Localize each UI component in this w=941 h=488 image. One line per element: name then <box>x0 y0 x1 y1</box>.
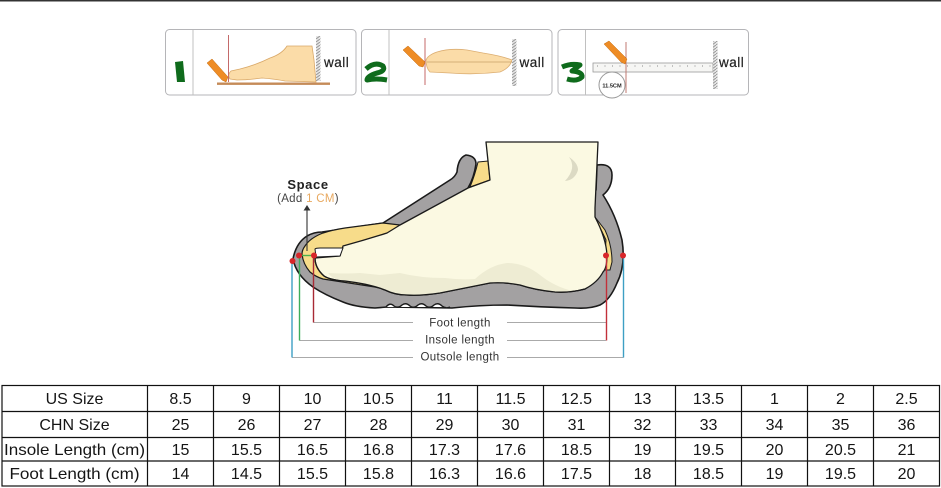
wall label: wall <box>323 55 349 70</box>
row: foot length <box>10 466 916 483</box>
row: foot length: Foot Length (cm) <box>10 466 140 483</box>
row: CHN size: 29 <box>436 417 454 434</box>
dimension: outsole length: Outsole length <box>420 352 500 364</box>
row: US size: 1 <box>770 391 779 408</box>
row: CHN size <box>39 417 916 434</box>
row: insole length: 19 <box>634 442 652 459</box>
row: US size: 12.5 <box>561 391 592 408</box>
icon: foot side view <box>229 46 316 82</box>
row: CHN size: 25 <box>172 417 190 434</box>
row: US size: 13 <box>634 391 652 408</box>
row: foot length: 14.5 <box>231 466 262 483</box>
callout: 11.5 cm reading: 11.5CM <box>602 84 622 90</box>
wall label: wall <box>518 55 545 70</box>
row: CHN size: 27 <box>304 417 322 434</box>
yellow heel lining <box>595 217 612 270</box>
row: insole length: 15.5 <box>231 442 262 459</box>
space heading: (Add 1 CM) <box>277 193 339 205</box>
icon: wall hatch <box>512 39 516 86</box>
row: insole length: Insole Length (cm) <box>4 442 145 459</box>
dimension: foot length: Foot length <box>429 318 491 330</box>
arrow: space up <box>304 206 310 251</box>
row: foot length: 19 <box>766 466 784 483</box>
icon: foot top view <box>426 49 512 74</box>
row: US size: 2.5 <box>895 391 918 408</box>
size table <box>2 386 940 486</box>
space heading <box>277 177 339 205</box>
row: insole length: 21 <box>898 442 916 459</box>
space heading: Space <box>287 177 329 192</box>
row: US size: 8.5 <box>169 391 192 408</box>
row: CHN size: 32 <box>634 417 652 434</box>
dimension: insole length: Insole length <box>425 334 495 346</box>
row: US size: 2 <box>836 391 845 408</box>
measure line <box>625 42 627 93</box>
ground line <box>217 82 330 85</box>
foot shading <box>328 263 573 295</box>
row: foot length: 20 <box>898 466 916 483</box>
row: insole length <box>4 442 916 459</box>
row: foot length: 15.8 <box>363 466 394 483</box>
row: insole length: 20 <box>766 442 784 459</box>
row: foot length: 19.5 <box>825 466 856 483</box>
row: US size: 9 <box>242 391 251 408</box>
row: foot length: 15.5 <box>297 466 328 483</box>
shoe outer body <box>293 155 623 308</box>
yellow tongue <box>470 161 490 187</box>
row: CHN size: 34 <box>766 417 784 434</box>
table grid <box>2 386 940 486</box>
yellow insole <box>302 223 400 293</box>
measure line <box>424 38 426 85</box>
row: US size: 10.5 <box>363 391 394 408</box>
row: insole length: 15 <box>172 442 190 459</box>
wall label: wall <box>718 55 744 70</box>
ruler <box>593 63 713 72</box>
foot <box>315 142 607 295</box>
row: foot length: 18 <box>634 466 652 483</box>
row: insole length: 19.5 <box>693 442 724 459</box>
row: CHN size: 33 <box>700 417 718 434</box>
icon: number 1 <box>175 61 185 82</box>
icon: pencil <box>604 41 627 64</box>
row: insole length: 17.3 <box>429 442 460 459</box>
shoe cross-section diagram <box>277 142 626 364</box>
icon: number 3 <box>562 64 582 80</box>
row: CHN size: 35 <box>832 417 850 434</box>
row: CHN size: CHN Size <box>39 417 110 434</box>
panel: step 3 read ruler <box>558 30 748 98</box>
row: insole length: 16.5 <box>297 442 328 459</box>
measurement points <box>290 252 626 264</box>
panel: step 1 measure side view <box>166 30 356 95</box>
sole tread <box>386 304 450 308</box>
gap line green <box>299 254 314 256</box>
callout: 11.5 cm reading <box>599 72 625 98</box>
row: CHN size: 31 <box>568 417 586 434</box>
icon: pencil <box>207 59 228 82</box>
row: US size: 13.5 <box>693 391 724 408</box>
row: foot length: 16.6 <box>495 466 526 483</box>
row: foot length: 18.5 <box>693 466 724 483</box>
row: foot length: 17.5 <box>561 466 592 483</box>
row: US size: 11.5 <box>496 391 526 408</box>
panel: step 2 measure top view <box>362 30 552 95</box>
row: CHN size: 26 <box>238 417 256 434</box>
row: US size <box>46 391 918 408</box>
row: insole length: 18.5 <box>561 442 592 459</box>
row: US size: 11 <box>436 391 453 408</box>
toe gap <box>315 248 343 257</box>
row: insole length: 20.5 <box>825 442 856 459</box>
icon: number 2 <box>366 64 387 80</box>
row: US size: 10 <box>304 391 322 408</box>
icon: pencil <box>403 46 425 67</box>
row: foot length: 16.3 <box>429 466 460 483</box>
row: CHN size: 36 <box>898 417 916 434</box>
icon: wall hatch <box>713 41 718 89</box>
measure line <box>228 35 230 82</box>
row: foot length: 14 <box>172 466 190 483</box>
row: US size: US Size <box>46 391 104 408</box>
row: insole length: 17.6 <box>495 442 526 459</box>
foot outline lower <box>315 258 585 295</box>
ankle crease <box>565 157 578 181</box>
row: CHN size: 30 <box>502 417 520 434</box>
row: insole length: 16.8 <box>363 442 394 459</box>
row: CHN size: 28 <box>370 417 388 434</box>
icon: wall hatch <box>316 36 320 81</box>
